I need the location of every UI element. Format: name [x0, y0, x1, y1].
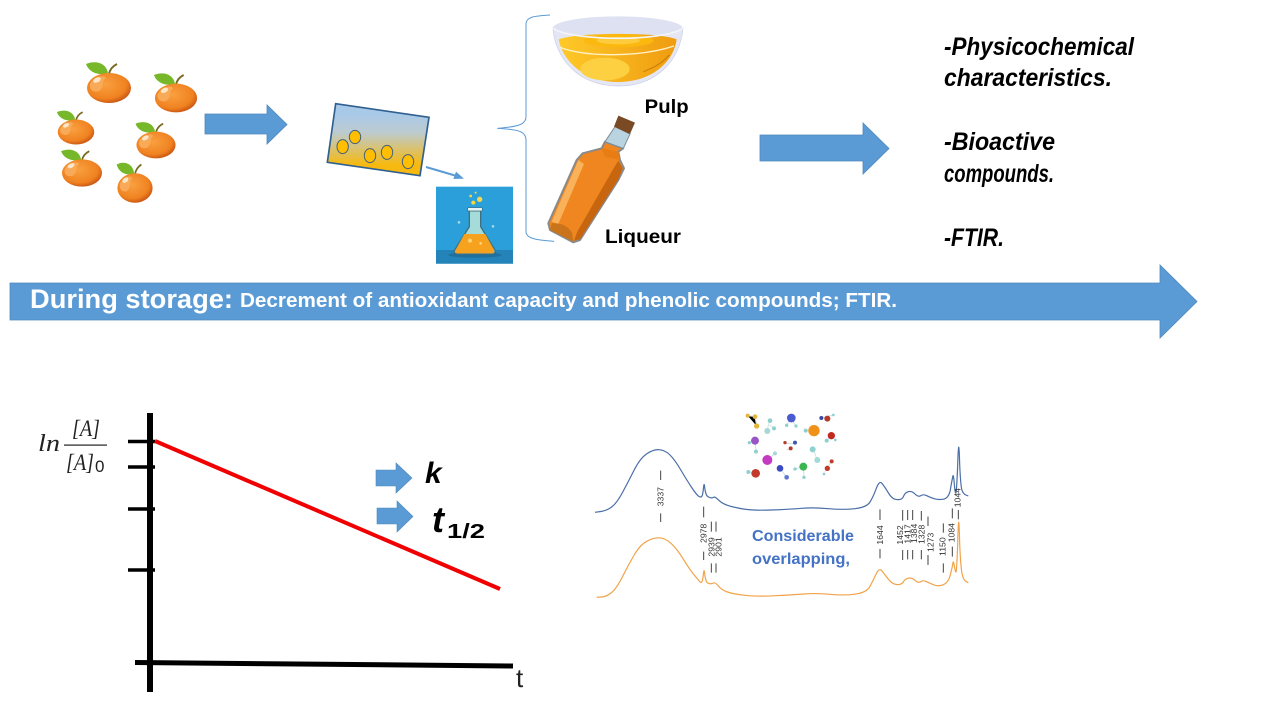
text: considerable overlapping: [752, 528, 854, 568]
chart: FTIR spectra: [595, 414, 968, 597]
icon: tangerines: [57, 62, 197, 203]
axis label: ln [A]/[A]0: [A]: [66, 450, 94, 475]
icon: maceration tank, flask, products and brace: [327, 15, 689, 264]
axis label: t: t: [516, 663, 524, 693]
axis label: ln [A]/[A]0: [38, 416, 107, 476]
axis label: ln [A]/[A]0: ln: [38, 431, 60, 457]
peak labels: 1384: [909, 524, 919, 543]
peak labels: 1150: [938, 537, 948, 556]
peak labels: 1044: [953, 488, 963, 507]
arrow banner: during storage: [10, 265, 1197, 338]
axes: [128, 413, 513, 692]
icon: liqueur bottle: [548, 116, 635, 242]
axis label: ln [A]/[A]0: [A]: [72, 416, 100, 441]
peak labels: 1644: [875, 525, 885, 545]
axis label: ln [A]/[A]0: 0: [95, 457, 104, 476]
peak labels: 1273: [925, 533, 935, 552]
peak labels: 2901: [713, 537, 723, 557]
text: analyses list: compounds.: [944, 160, 1054, 188]
text: analyses list: characteristics.: [944, 64, 1112, 92]
arrow banner: during storage: Decrement of antioxidant capacity and phenolic compounds; FTIR.: [240, 290, 897, 312]
peak labels: 1084: [947, 523, 957, 542]
molecules illustration: [746, 414, 837, 480]
arrow: tank to flask: [426, 167, 464, 179]
decay line: [155, 441, 500, 589]
peak labels: 2939: [707, 537, 717, 557]
peak labels: 3337: [656, 487, 666, 506]
icon: bowl of pulp: [553, 16, 683, 86]
text: analyses list: -FTIR.: [944, 224, 1004, 252]
label: half-life: [432, 499, 485, 543]
orange spectrum line: [597, 522, 968, 597]
icon: laboratory flask: [436, 187, 513, 264]
text: analyses list: -Bioactive: [944, 128, 1055, 156]
peak labels: [656, 471, 963, 573]
blue spectrum line: [595, 447, 968, 512]
arrow banner: during storage: During storage:: [30, 284, 233, 314]
peak labels: 1452: [895, 525, 905, 545]
label: half-life: 1/2: [447, 521, 485, 543]
peak labels: 1417: [902, 524, 912, 544]
peak labels: 1328: [917, 525, 927, 544]
label: k: k: [425, 457, 443, 490]
arrow: products to analyses: [760, 123, 889, 174]
brace: [497, 15, 554, 241]
text: considerable overlapping: Considerable: [752, 528, 854, 545]
label: half-life: t: [432, 499, 446, 540]
arrow: to half-life: [377, 501, 413, 532]
text: analyses list: [944, 33, 1135, 252]
icon: maceration tank: [327, 104, 429, 176]
label: Pulp: Pulp: [645, 97, 689, 118]
text: considerable overlapping: overlapping,: [752, 551, 850, 568]
text: analyses list: -Physicochemical: [944, 33, 1135, 61]
peak labels: 2978: [699, 524, 709, 543]
arrow: tangerines to maceration: [205, 105, 287, 144]
chart: kinetic plot: [38, 413, 524, 693]
label: Liqueur: Liqueur: [605, 227, 682, 248]
arrow: to k: [376, 463, 412, 493]
